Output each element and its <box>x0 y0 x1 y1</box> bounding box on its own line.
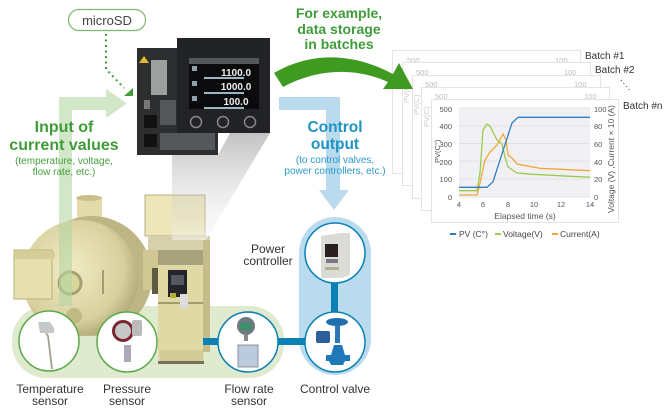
shadow below controller <box>172 133 270 240</box>
panel: batch #1 card: 500 <box>407 56 420 65</box>
panel: batch #n chart: 400 <box>439 122 452 131</box>
legend <box>450 229 600 239</box>
heading: data storage in batches: For example, <box>296 5 382 21</box>
label: control valve: Control valve <box>300 382 370 396</box>
legend: PV (C°) <box>459 229 488 239</box>
line: voltage <box>459 124 590 191</box>
note: input examples: (temperature, voltage, <box>15 156 113 167</box>
legend: Voltage(V) <box>503 229 543 239</box>
heading: data storage in batches: in batches <box>304 36 374 52</box>
panel: batch #4 card: 100 <box>584 92 597 101</box>
label: batch #2: Batch #2 <box>595 65 635 76</box>
panel: batch #2 card: 500 <box>416 68 429 77</box>
panel: batch #3 card: 500 <box>425 80 438 89</box>
arrow: input of current values <box>59 89 127 306</box>
heading: control output: Control <box>307 119 363 136</box>
connector: control valve to power controller <box>331 280 338 316</box>
panel: batch #n chart <box>432 100 618 222</box>
icon: control valve <box>305 312 365 372</box>
icon: controller <box>137 38 270 155</box>
callout: microSD <box>68 10 146 30</box>
legend: Current(A) <box>560 229 600 239</box>
panel: batch #n chart: PV(C°) <box>433 139 442 163</box>
label: pressure sensor: Pressure <box>103 382 151 396</box>
panel: batch #n chart: 8 <box>506 200 510 209</box>
label: temperature sensor: sensor <box>32 394 68 408</box>
label: batch #1: Batch #1 <box>585 51 625 62</box>
label: temperature sensor: Temperature <box>16 382 84 396</box>
panel: batch #n chart: 0 <box>448 193 452 202</box>
panel: batch #n chart: 0 <box>594 193 598 202</box>
heading: input of current values: current values <box>9 137 119 154</box>
label: power controller: Power <box>251 242 285 256</box>
ellipsis dots between batches <box>621 80 631 92</box>
heading: control output: output <box>311 136 359 153</box>
panel: batch #n chart: Voltage (V) ,Current × 10 (A) <box>606 105 616 213</box>
label: pressure sensor: sensor <box>109 394 145 408</box>
panel: batch #2 card: PV(C) <box>402 82 411 103</box>
icon: temperature sensor <box>19 311 79 371</box>
connector: flow sensor to control valve <box>276 338 308 345</box>
icon: power controller <box>305 223 365 283</box>
panel: batch #n chart: 10 <box>530 200 538 209</box>
panel: batch #n chart: 40 <box>594 158 602 167</box>
icon: flow rate sensor <box>218 312 278 372</box>
panel: blue output band <box>299 217 371 375</box>
panel: batch #3 card: PV(C) <box>412 94 421 115</box>
connector: flow to cabinet <box>203 338 221 345</box>
label: power controller: controller <box>243 254 293 268</box>
note: input examples: flow rate, etc.) <box>33 167 95 178</box>
panel: batch #n chart: 60 <box>594 140 602 149</box>
panel: batch #n chart: 14 <box>586 200 594 209</box>
panel: batch #3 card <box>412 76 600 198</box>
panel: batch #n chart: 200 <box>439 158 452 167</box>
arrow: control output <box>279 97 349 210</box>
panel: batch #4 card: PV(C) <box>422 106 431 127</box>
panel: batch #3 card: 100 <box>574 80 587 89</box>
panel: green sensor band <box>12 306 284 378</box>
panel: batch #4 card <box>422 88 610 210</box>
arrow: microSD to controller <box>106 34 133 96</box>
icon: pressure sensor <box>97 312 157 372</box>
label: flow rate sensor: sensor <box>231 394 267 408</box>
heading: data storage in batches: data storage <box>297 21 381 37</box>
panel: batch #1 card: 100 <box>555 56 568 65</box>
icon: vacuum furnace <box>14 195 210 364</box>
panel: batch #2 card <box>402 62 590 186</box>
icon: controller: 100.0 <box>223 97 249 108</box>
panel: batch #n chart: 20 <box>594 175 602 184</box>
panel: batch #n chart: Elapsed time (s) <box>494 211 556 221</box>
panel: batch #1 card <box>392 50 580 174</box>
panel: batch #n chart: 12 <box>557 200 565 209</box>
icon: controller: 1100.0 <box>221 68 251 79</box>
arrow: data storage curved <box>274 57 413 89</box>
icon: controller: 1000.0 <box>221 82 252 93</box>
panel: batch #n chart: 300 <box>439 140 452 149</box>
panel: batch #n chart: 6 <box>481 200 485 209</box>
line: current <box>459 134 590 195</box>
label: batch #n: Batch #n <box>623 101 662 112</box>
note: output examples: power controllers, etc.) <box>284 166 386 177</box>
label: flow rate sensor: Flow rate <box>224 382 274 396</box>
panel: batch #n chart: 100 <box>439 175 452 184</box>
heading: input of current values: Input of <box>35 119 93 136</box>
panel: batch #4 card: 500 <box>435 92 448 101</box>
panel: batch #n chart: 80 <box>594 122 602 131</box>
panel: batch #n chart: 100 <box>594 105 607 114</box>
panel: batch #2 card: 100 <box>564 68 577 77</box>
line: PV <box>459 117 590 187</box>
note: output examples: (to control valves, <box>296 155 374 166</box>
callout: microSD: microSD <box>82 13 132 28</box>
panel: batch #n chart: 4 <box>457 200 461 209</box>
panel: batch #n chart: 500 <box>439 105 452 114</box>
